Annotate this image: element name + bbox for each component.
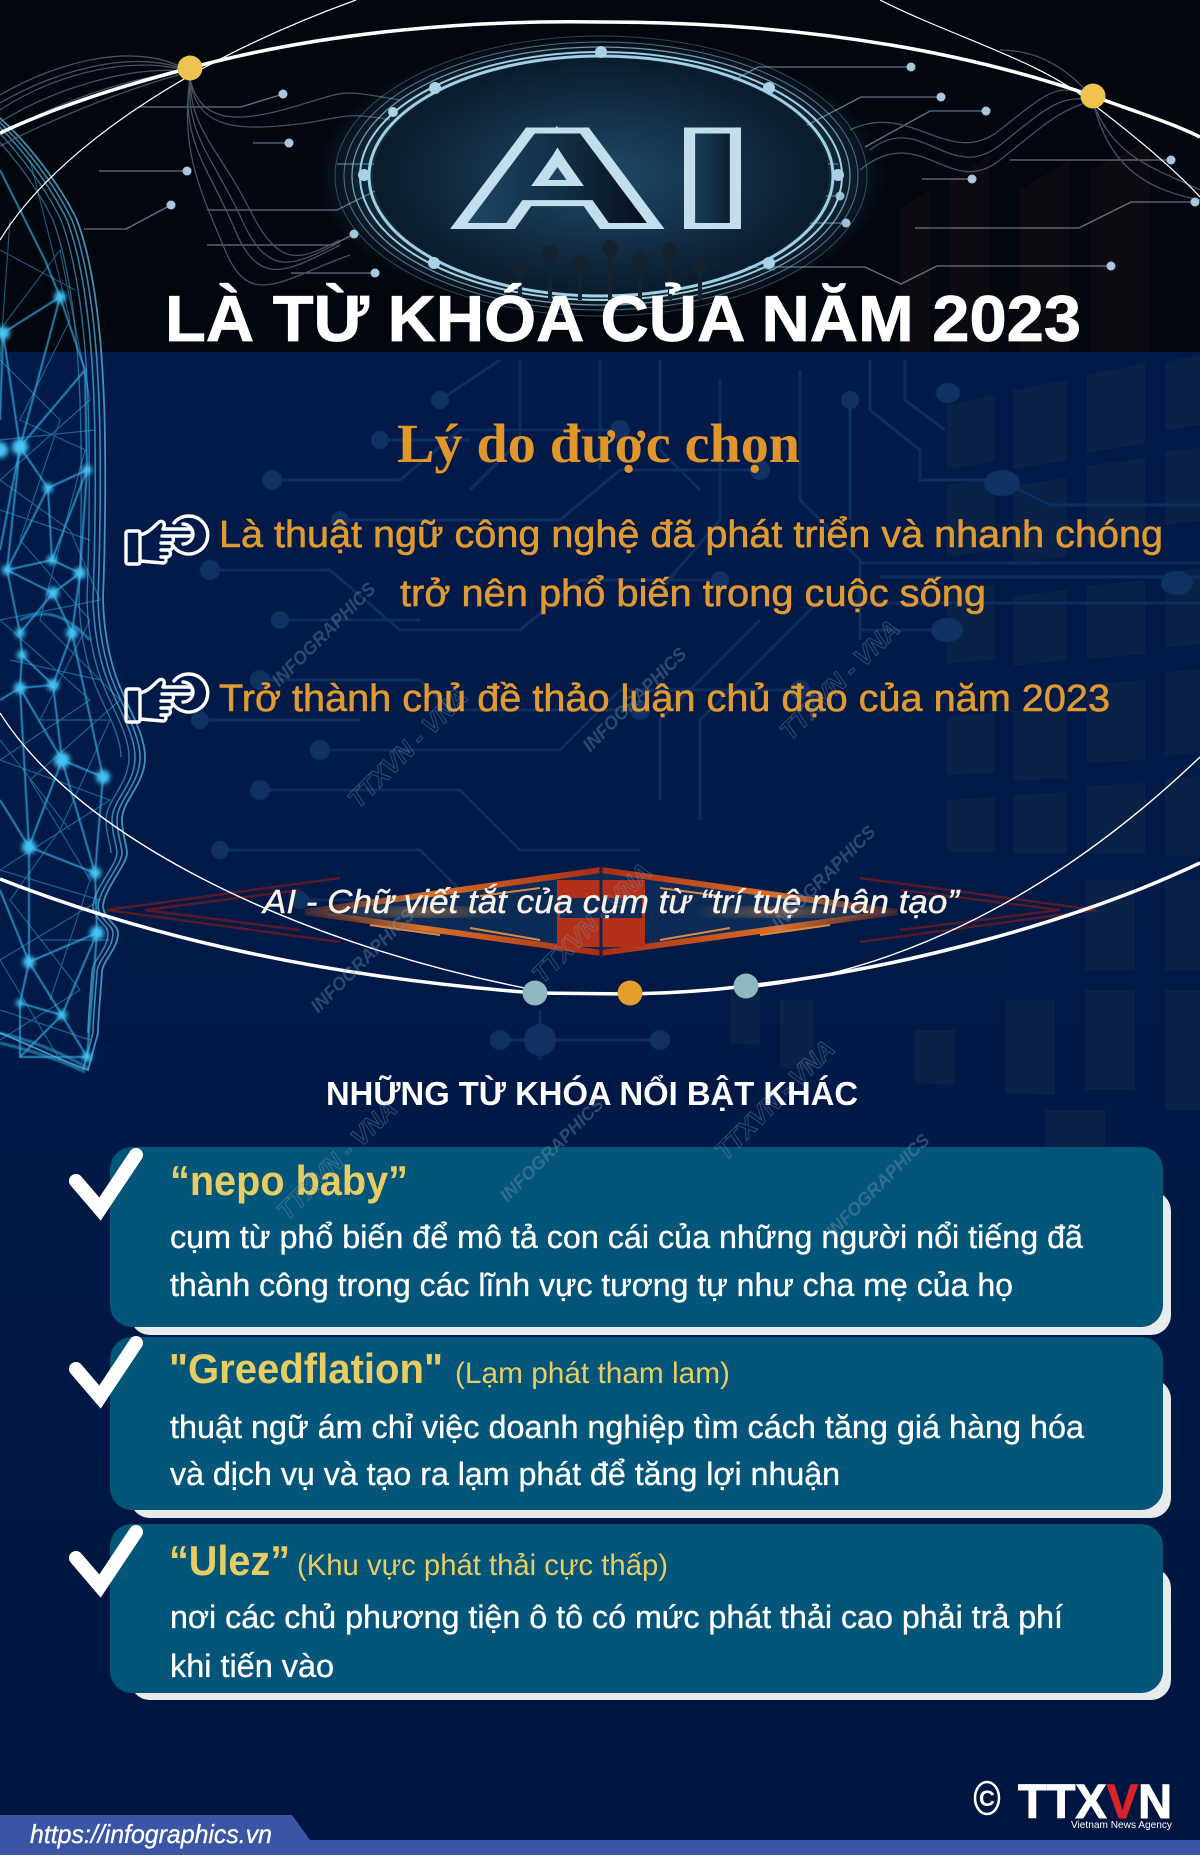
watermarks: INFOGRAPHICS (496, 1094, 608, 1206)
TTXVN logo (975, 1776, 1173, 1831)
card: nepo baby: cụm từ phổ biến để mô tả con cái của những người nổi tiếng đã (170, 1219, 1083, 1255)
title: LÀ TỪ KHÓA CỦA NĂM 2023 (165, 282, 1081, 355)
footer bar with URL (0, 1815, 1200, 1855)
watermarks: INFOGRAPHICS (307, 905, 419, 1017)
card: Ulez (76, 1524, 1171, 1700)
decorative red-orange diamond (107, 866, 1096, 958)
faint pin columns under emblem (514, 242, 706, 300)
footer bar with URL: https://infographics.vn (30, 1819, 272, 1849)
watermarks: TTXVN - VNA (527, 858, 658, 989)
card text: "Greedflation" (169, 1345, 443, 1392)
emblem letters AI (461, 105, 746, 251)
watermarks: TTXVN - VNA (343, 683, 474, 814)
orbit arcs and nodes (0, 0, 1200, 1006)
icon: pointing hand (126, 516, 208, 564)
watermarks: INFOGRAPHICS (822, 1130, 934, 1242)
decorative circuit traces around the emblem (0, 50, 1200, 285)
check icon (76, 1155, 136, 1209)
section heading: other keywords: NHỮNG TỪ KHÓA NỔI BẬT KHÁC (326, 1075, 858, 1112)
TTXVN logo: C (979, 1786, 995, 1811)
reason 1 text (219, 514, 1163, 615)
card text: “Ulez” (169, 1537, 290, 1584)
watermarks: INFOGRAPHICS (268, 579, 380, 691)
card: Greedflation (76, 1337, 1171, 1518)
trace end nodes (166, 62, 1200, 278)
reason 2 text: Trở thành chủ đề thảo luận chủ đạo của năm 2023 (219, 678, 1110, 720)
section heading: reasons: Lý do được chọn (397, 413, 800, 474)
watermarks: TTXVN - VNA (710, 1035, 841, 1166)
card text: “nepo baby” (170, 1157, 408, 1204)
card: Greedflation: thuật ngữ ám chỉ việc doanh nghiệp tìm cách tăng giá hàng hóa (170, 1409, 1084, 1445)
reason 1 text: Là thuật ngữ công nghệ đã phát triển và nhanh chóng (219, 514, 1163, 556)
watermarks: TTXVN - VNA (775, 615, 906, 746)
icon: pointing hand (126, 674, 208, 722)
TTXVN logo: Vietnam News Agency (1071, 1819, 1173, 1831)
copyright mark (975, 1782, 999, 1814)
check icon (76, 1343, 136, 1397)
check icon (76, 1532, 136, 1586)
card: Ulez: (Khu vực phát thải cực thấp) (297, 1549, 668, 1582)
reason 1 text: trở nên phổ biến trong cuộc sống (400, 573, 986, 615)
emblem letters AI: A (461, 105, 654, 251)
background: faint circuit pattern (191, 360, 1200, 1060)
card: Greedflation: và dịch vụ và tạo ra lạm phát để tăng lợi nhuận (170, 1456, 840, 1492)
card: Ulez: nơi các chủ phương tiện ô tô có mức phát thải cao phải trả phí (170, 1599, 1063, 1635)
watermarks (268, 579, 934, 1242)
watermarks: INFOGRAPHICS (579, 644, 691, 756)
reason 1 (126, 514, 1163, 615)
watermarks: TTXVN - VNA (272, 1095, 403, 1226)
AI definition caption: AI - Chữ viết tắt của cụm từ “trí tuệ nhân tạo” (261, 883, 961, 920)
card: Greedflation: (Lạm phát tham lam) (455, 1357, 730, 1390)
emblem letters AI: I (679, 105, 746, 251)
yellow and teal nodes (178, 56, 1106, 1006)
decorative head mesh (0, 118, 145, 1072)
reason 2 (126, 674, 1110, 722)
AI emblem (316, 36, 886, 316)
wordmark: TTXVN (1018, 1776, 1172, 1829)
card: nepo baby: thành công trong các lĩnh vực tương tự như cha mẹ của họ (170, 1267, 1013, 1303)
card: Ulez: khi tiến vào (170, 1648, 334, 1684)
card: nepo baby (76, 1147, 1171, 1335)
watermarks: INFOGRAPHICS (768, 822, 880, 934)
